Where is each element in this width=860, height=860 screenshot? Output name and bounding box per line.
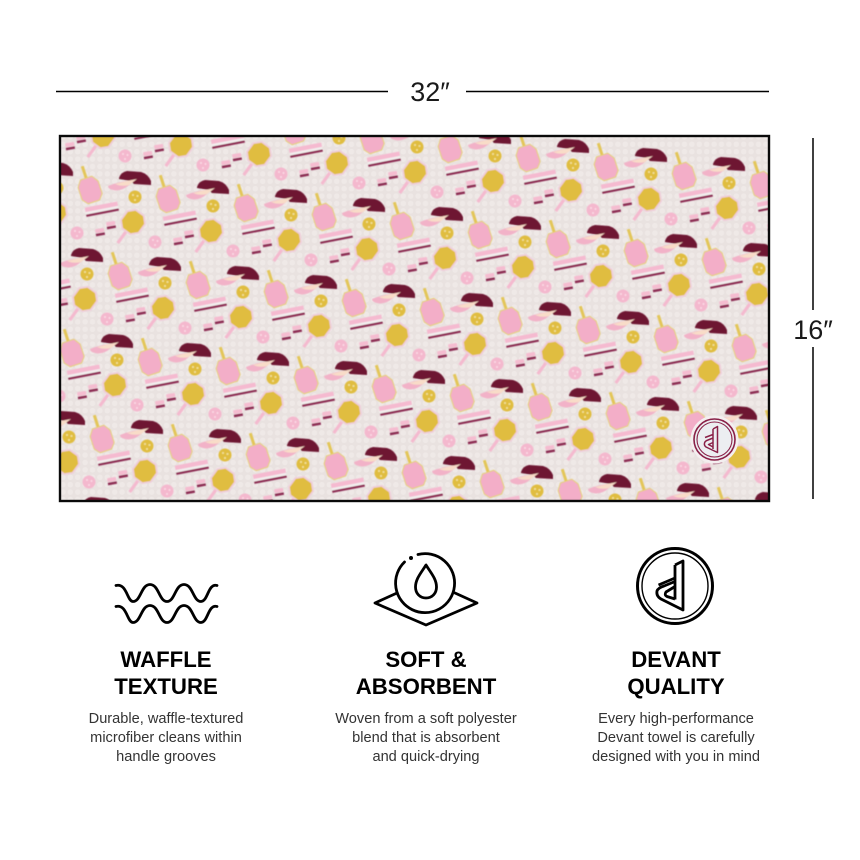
icon: water drop on fabric bbox=[375, 554, 477, 625]
heading: waffle texture: TEXTURE bbox=[114, 674, 218, 699]
panel: devant quality bbox=[592, 548, 760, 765]
text: soft and absorbent description: Woven from a soft polyester bbox=[335, 711, 517, 727]
panel: waffle texture bbox=[89, 584, 243, 765]
icon: towel logo badge bbox=[690, 416, 738, 464]
text: soft and absorbent description: blend that is absorbent bbox=[352, 730, 500, 746]
heading: waffle texture: WAFFLE bbox=[120, 647, 212, 672]
heading: devant quality: DEVANT bbox=[631, 647, 721, 672]
text: devant quality description: Devant towel is carefully bbox=[597, 730, 755, 746]
panel: towel with printed pattern bbox=[58, 134, 770, 502]
text: waffle texture description: microfiber cleans within bbox=[90, 730, 242, 746]
text: waffle texture description: Durable, waffle-textured bbox=[89, 711, 243, 727]
text: devant quality description: designed with you in mind bbox=[592, 749, 760, 765]
text: soft and absorbent description: and quick-drying bbox=[372, 749, 480, 765]
height dimension: 16 inches: 16″ bbox=[793, 315, 833, 345]
text: devant quality description: Every high-performance bbox=[598, 711, 754, 727]
heading: soft and absorbent: SOFT & bbox=[385, 647, 467, 672]
icon: waves bbox=[116, 584, 217, 622]
heading: soft and absorbent: ABSORBENT bbox=[356, 674, 497, 699]
heading: devant quality: QUALITY bbox=[627, 674, 725, 699]
width dimension: 32 inches: 32″ bbox=[410, 77, 450, 107]
icon: devant logo bbox=[638, 548, 712, 624]
text: waffle texture description: handle grooves bbox=[116, 749, 216, 765]
panel: soft and absorbent bbox=[335, 554, 517, 765]
